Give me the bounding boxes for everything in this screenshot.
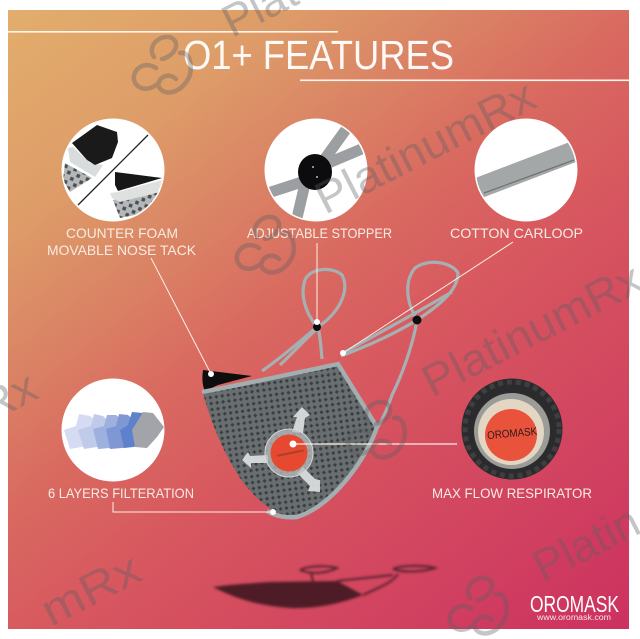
title rule top	[8, 31, 338, 33]
panel: counter foam nose tack	[47, 118, 197, 258]
panel: max flow respirator	[432, 378, 592, 501]
label: COUNTER FOAM	[66, 225, 178, 241]
watermarks: PlatinumRx	[306, 69, 544, 224]
mask illustration	[202, 262, 458, 517]
panel: filter layers	[48, 378, 194, 501]
mask straps	[262, 262, 458, 436]
icon: carloop photo	[474, 118, 578, 222]
label: ADJUSTABLE STOPPER	[247, 225, 392, 241]
nose foam	[202, 370, 252, 391]
title: O1+ FEATURES	[183, 32, 454, 78]
watermark symbols	[134, 37, 507, 633]
label: 6 LAYERS FILTERATION	[48, 485, 194, 501]
mask trim	[202, 364, 377, 517]
shadow of mask	[213, 566, 435, 608]
label: MAX FLOW RESPIRATOR	[432, 485, 592, 501]
icon: nose tack photo	[62, 118, 164, 222]
stopper beads	[313, 323, 321, 331]
callout dots	[208, 319, 346, 515]
label: MOVABLE NOSE TACK	[47, 242, 197, 258]
watermarks: mRx	[32, 543, 150, 636]
logo	[530, 591, 619, 622]
mask body	[203, 364, 377, 517]
watermarks: PlatinumRx	[413, 252, 640, 407]
panel: adjustable stopper	[247, 118, 392, 241]
valve	[265, 429, 313, 477]
label: COTTON CARLOOP	[450, 225, 583, 241]
icon: stopper photo	[264, 118, 368, 222]
airflow arrows	[242, 407, 320, 492]
icon: layers photo	[62, 378, 164, 482]
panel: cotton carloop	[450, 118, 583, 241]
logo url: www.oromask.com	[536, 613, 611, 622]
title rule bottom	[300, 80, 629, 81]
callout lines	[113, 242, 513, 512]
icon: respirator photo: OROMASK	[487, 426, 538, 442]
icon: respirator photo	[462, 378, 562, 480]
